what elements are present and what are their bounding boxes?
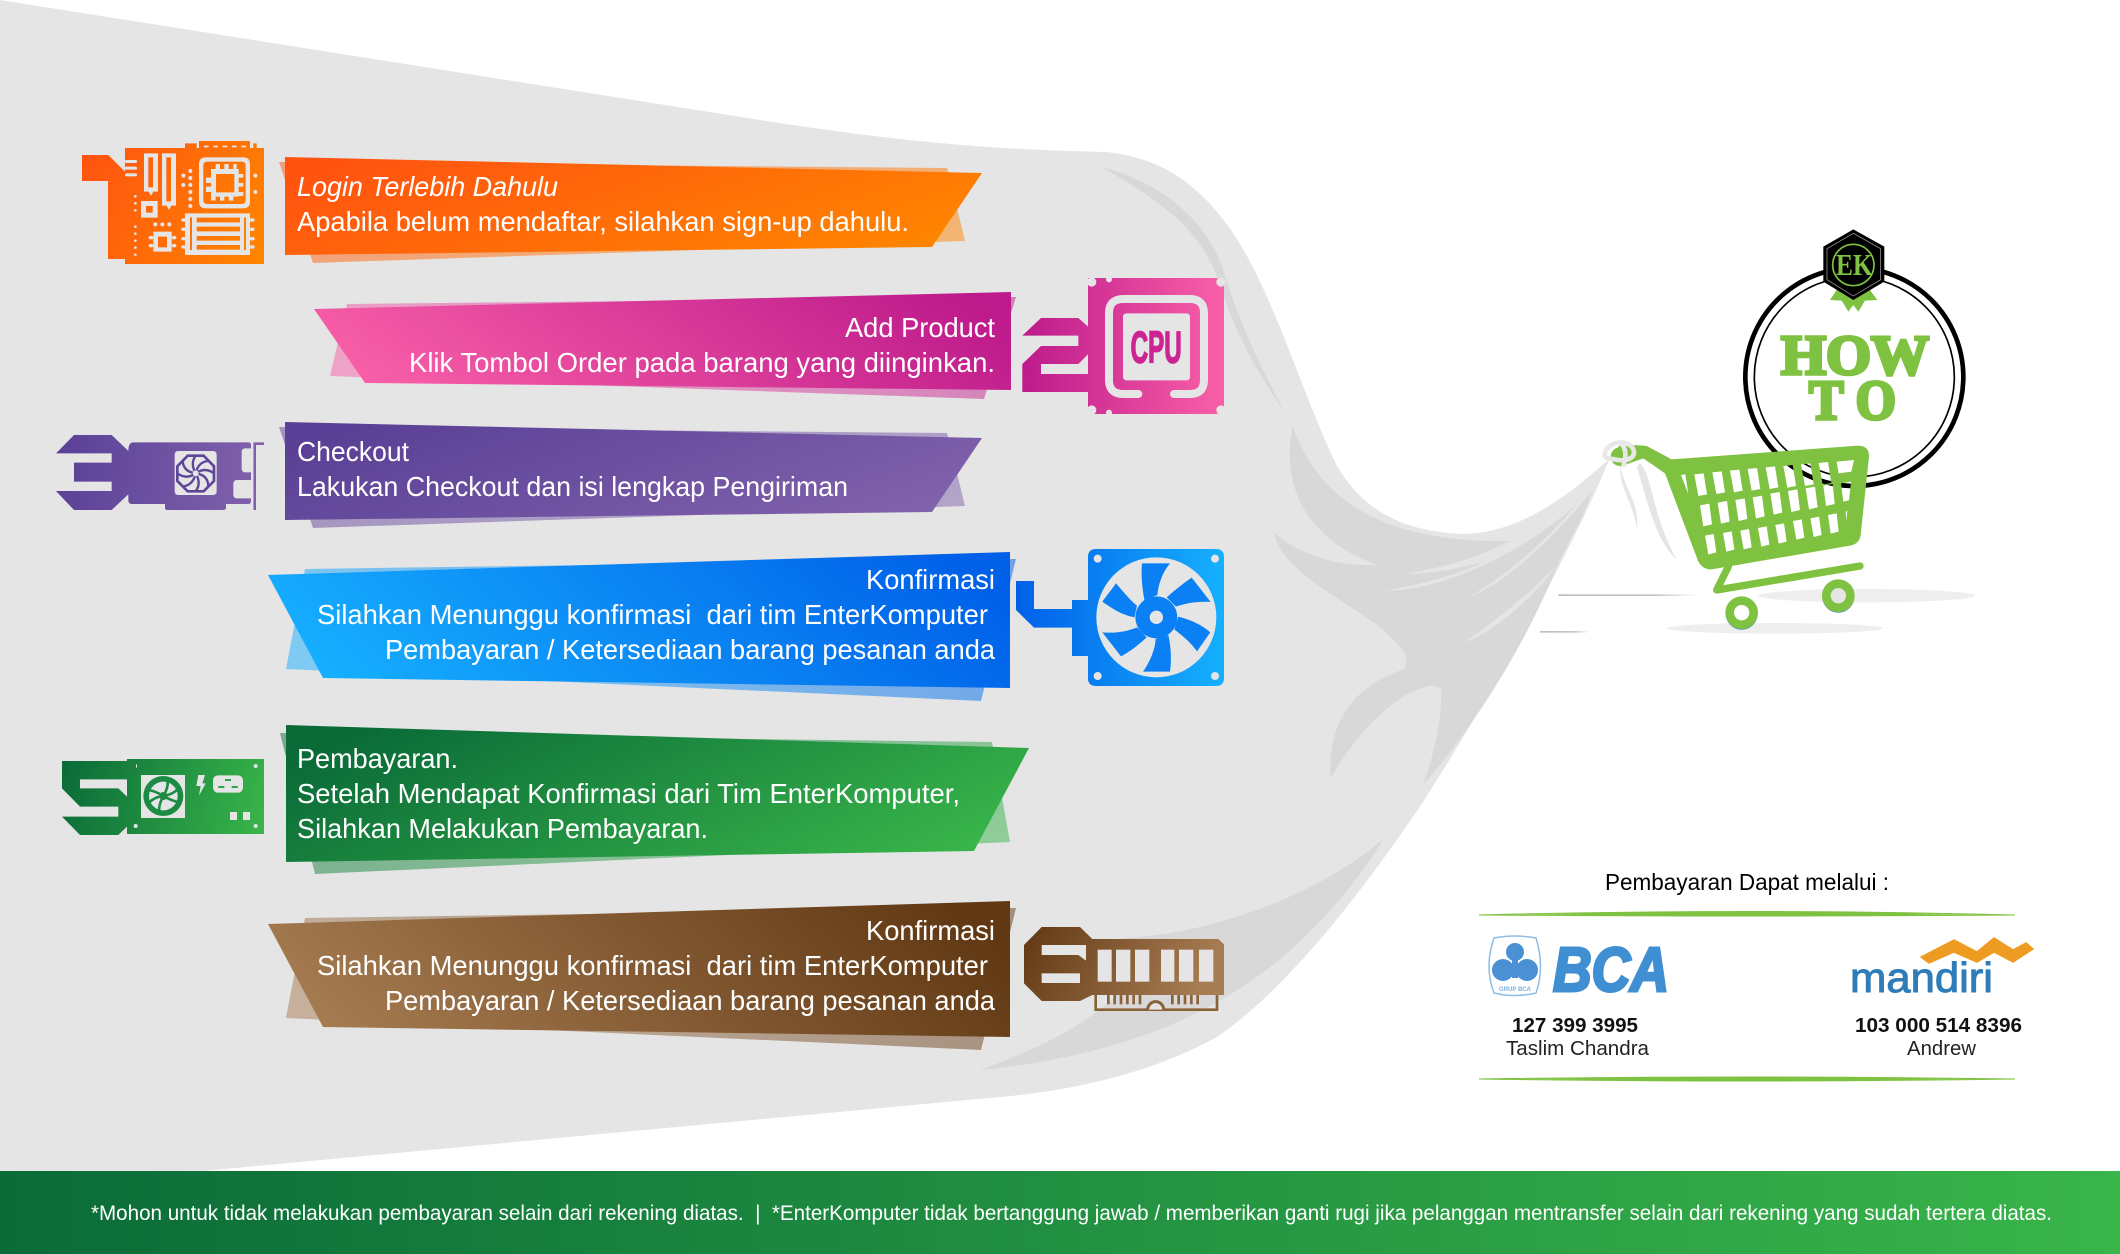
banner 2: add product: Klik Tombol Order pada barang yang diinginkan. <box>409 347 995 378</box>
icon: CPU number 2 <box>1022 276 1226 416</box>
banner 1: login: Login Terlebih Dahulu <box>297 171 558 202</box>
divider bottom <box>1479 1077 2015 1081</box>
banner 3: checkout: Checkout <box>297 436 409 467</box>
account: BCA: 127 399 3995 <box>1512 1015 1638 1037</box>
account: BCA <box>1506 1015 1650 1060</box>
banner 1: login <box>279 157 982 263</box>
badge: how to ring: EK <box>1836 248 1873 282</box>
cloth folds <box>979 168 1591 1070</box>
banner 6: konfirmasi <box>268 901 1016 1050</box>
account: Mandiri: 103 000 514 8396 <box>1855 1015 2022 1037</box>
banner 5: pembayaran <box>280 725 1029 874</box>
banner 5: pembayaran: Silahkan Melakukan Pembayaran. <box>297 813 708 844</box>
icon: RAM number 6 <box>1024 927 1224 1010</box>
banner 4: konfirmasi: Konfirmasi <box>866 564 995 595</box>
banner 5: pembayaran: Pembayaran. <box>297 743 458 774</box>
logo: mandiri <box>1850 938 2033 1001</box>
icon: shopping cart tied to the sack <box>1605 442 1869 626</box>
banner 6: konfirmasi: Konfirmasi <box>866 915 995 946</box>
banner 3: checkout: Lakukan Checkout dan isi lengkap Pengiriman <box>297 471 848 502</box>
background: grey cloth sack <box>0 0 1610 1171</box>
logo: BCA: BCA <box>1553 936 1669 1005</box>
icon: fan number 4 <box>1016 549 1224 686</box>
icon: CPU number 2: CPU <box>1131 323 1182 372</box>
logo: BCA: GRUP BCA <box>1499 987 1532 993</box>
banner 5: pembayaran: Setelah Mendapat Konfirmasi dari Tim EnterKomputer, <box>297 778 960 809</box>
account: Mandiri: Andrew <box>1907 1038 1977 1060</box>
logo: mandiri: mandiri <box>1850 954 1993 1001</box>
banner 1: login: Apabila belum mendaftar, silahkan sign-up dahulu. <box>297 206 909 237</box>
banner 4: konfirmasi: Silahkan Menunggu konfirmasi dari tim EnterKomputer <box>317 599 988 630</box>
account: Mandiri <box>1855 1015 2022 1060</box>
account: BCA: Taslim Chandra <box>1506 1038 1650 1060</box>
heading: how to <box>1781 325 1929 432</box>
payment heading: Pembayaran Dapat melalui : <box>1605 869 1889 895</box>
banner 6: konfirmasi: Silahkan Menunggu konfirmasi dari tim EnterKomputer <box>317 950 988 981</box>
banner 2: add product <box>314 292 1016 399</box>
banner 4: konfirmasi <box>268 552 1016 701</box>
icon: motherboard number 1 <box>82 141 264 264</box>
banner 4: konfirmasi: Pembayaran / Ketersediaan barang pesanan anda <box>385 634 995 665</box>
icon: power supply number 5 <box>62 759 264 835</box>
ground shadows <box>1540 589 1975 634</box>
logo: BCA <box>1489 936 1669 1005</box>
badge: how to ring <box>1745 229 1963 486</box>
footer bar <box>0 1171 2120 1254</box>
heading: how to: T O <box>1809 370 1896 432</box>
banner 6: konfirmasi: Pembayaran / Ketersediaan barang pesanan anda <box>385 985 995 1016</box>
banner 2: add product: Add Product <box>845 312 995 343</box>
footer bar: *Mohon untuk tidak melakukan pembayaran selain dari rekening diatas. | *EnterKomputer tidak bertanggung jawab / memberikan ganti rugi jika pelanggan mentransfer selain dari rekening yang sudah tertera diatas. <box>91 1202 2052 1225</box>
banner 3: checkout <box>279 422 982 528</box>
divider top <box>1479 912 2015 916</box>
heading: how to: HOW <box>1781 325 1929 387</box>
icon: graphics card number 3 <box>56 435 264 510</box>
